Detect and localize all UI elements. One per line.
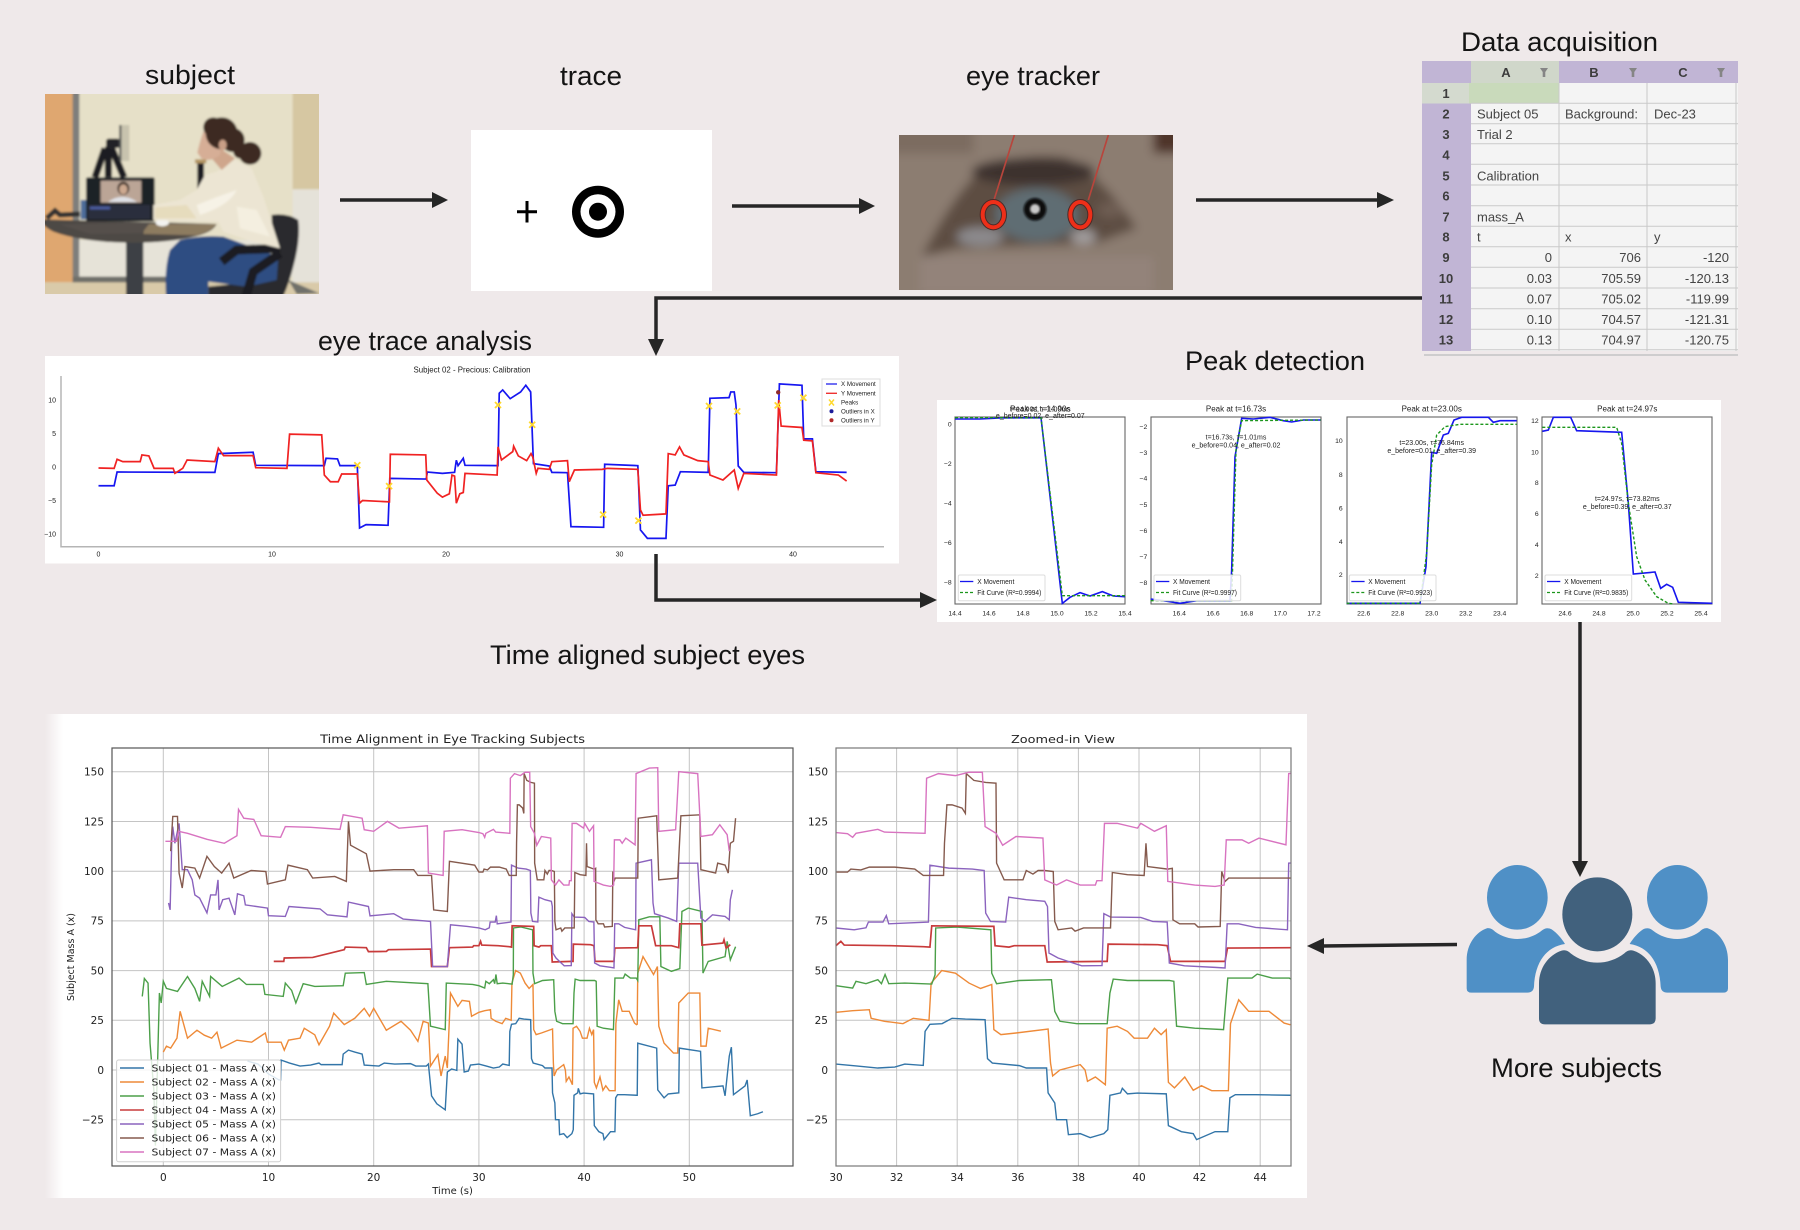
chart: time alignment in eye tracking subjects: Subject Mass A (x) [66,913,77,1001]
outlier marker [776,390,780,394]
table: spreadsheet of eye data [1422,61,1738,355]
arrow: eye trace analysis to peak detection [656,554,937,608]
chart legend: Outliers in Y [841,418,875,424]
plot: peak at 16.73s: t=16.73s, τ=1.01ms [1206,434,1267,442]
panel: peak detection plots [937,400,1721,622]
panel: eye trace analysis chart: 30 [616,552,623,558]
table: spreadsheet of eye data: -120.13 [1685,271,1729,286]
chart legend: Y Movement [841,390,876,398]
chart legend [822,379,880,426]
plot: peak at 24.97s: Fit Curve (R²=0.9835) [1564,590,1628,597]
plot: peak at 23.00s [1335,405,1517,618]
chart: time alignment in eye tracking subjects: 50 [91,965,104,977]
chart: time alignment in eye tracking subjects: 40 [577,1172,591,1184]
panel: eye trace analysis chart: 0 [97,552,101,558]
panel: eye trace analysis chart: −5 [48,498,56,505]
chart: zoomed-in view: 44 [1254,1172,1267,1184]
plot: peak at 14.90s: −6 [944,540,952,547]
chart legend: Outliers in X [841,408,875,416]
plot: peak at 23.00s: 23.2 [1459,610,1473,618]
panel: trace stimulus [471,130,712,291]
table: spreadsheet of eye data: 3 [1442,127,1450,142]
chart legend: X Movement [841,381,876,388]
plot: peak at 14.90s: 0 [948,422,952,428]
arrow: eye tracker to data acquisition [1196,192,1394,208]
plot: peak at 23.00s: Fit Curve (R²=0.9923) [1368,590,1432,597]
chart legend: subjects: Subject 06 - Mass A (x) [152,1134,276,1145]
plot: peak at 16.73s: Fit Curve (R²=0.9997) [1173,590,1237,597]
chart: zoomed-in view: 34 [951,1172,964,1184]
table: spreadsheet of eye data: 6 [1442,188,1450,204]
table: spreadsheet of eye data: 0.10 [1527,312,1552,327]
chart: zoomed-in view [806,735,1292,1181]
chart: zoomed-in view: 0 [821,1065,828,1077]
plot: peak at 14.90s: −8 [944,580,952,586]
chart: zoomed-in view: −25 [806,1114,828,1126]
plot: peak at 23.00s: 23.4 [1493,610,1507,618]
plot: peak at 16.73s: X Movement [1173,579,1210,586]
plot: peak at 16.73s: −5 [1140,502,1148,509]
chart: time alignment in eye tracking subjects: Time Alignment in Eye Tracking Subjects [319,732,585,746]
table: spreadsheet of eye data: 2 [1442,106,1450,122]
plot: peak at 16.73s: −2 [1140,424,1148,431]
plot: peak at 24.97s: e_before=0.39, e_after=0.37 [1583,504,1672,511]
chart legend: subjects: Subject 04 - Mass A (x) [152,1106,276,1117]
chart legend: subjects: Subject 02 - Mass A (x) [152,1078,276,1089]
plot: peak at 16.73s: −4 [1140,476,1148,482]
table: spreadsheet of eye data: 706 [1619,250,1641,265]
chart: zoomed-in view: 75 [815,916,828,928]
table: spreadsheet of eye data: 10 [1439,271,1453,286]
heading: time aligned subject eyes: Time aligned subject eyes [490,640,805,670]
plot: peak at 16.73s: −8 [1140,580,1148,587]
plot: peak at 16.73s: 16.8 [1240,610,1254,618]
table: spreadsheet of eye data: 705.02 [1601,292,1641,306]
plot: peak at 23.00s: t=23.00s, τ=76.84ms [1399,440,1465,447]
icon: bullseye target [572,186,624,238]
chart: zoomed-in view: 40 [1132,1172,1146,1184]
table: spreadsheet of eye data: 5 [1442,168,1450,184]
icon: group of people [1467,865,1728,1024]
plot: peak at 24.97s: 24.8 [1592,610,1606,618]
chart: zoomed-in view: 30 [829,1172,843,1184]
table: spreadsheet of eye data: Dec-23 [1654,106,1696,122]
table: spreadsheet of eye data: Background: [1565,106,1638,122]
heading: subject: subject [145,60,236,90]
plot: peak at 14.90s: 15.4 [1118,610,1132,618]
table: spreadsheet of eye data: y [1654,230,1661,244]
plot: peak at 23.00s: X Movement [1368,579,1405,586]
chart: zoomed-in view: 25 [815,1015,828,1027]
plot: peak at 14.90s: −2 [944,461,952,468]
plot: peak at 14.90s: −4 [944,500,952,508]
table: spreadsheet of eye data: 1 [1442,86,1450,101]
plot: peak at 16.73s: −6 [1140,528,1148,535]
plot: peak at 16.73s: −3 [1140,450,1148,457]
table: spreadsheet of eye data: 8 [1442,230,1450,244]
table: spreadsheet of eye data: 0 [1545,250,1552,265]
plot: peak at 14.90s: 14.8 [1016,610,1030,618]
plot: peak at 16.73s: 17.0 [1274,610,1287,618]
table: spreadsheet of eye data: -120 [1703,250,1729,265]
plot: peak at 16.73s: 17.2 [1307,610,1321,618]
plot: peak at 14.90s: X Movement [977,579,1014,586]
plot: peak at 14.90s: 15.2 [1084,610,1098,618]
table: spreadsheet of eye data: Subject 05 [1477,106,1538,122]
table: spreadsheet of eye data: 704.97 [1601,332,1641,348]
chart: time alignment in eye tracking subjects: 25 [91,1015,104,1027]
chart: time alignment in eye tracking subjects: 75 [91,916,104,928]
plot: peak at 16.73s: e_before=0.04, e_after=0.02 [1192,442,1280,450]
heading: data acquisition: Data acquisition [1461,27,1658,57]
table: spreadsheet of eye data: mass_A [1477,210,1524,224]
chart: time alignment in eye tracking subjects: 100 [84,866,104,878]
plot: peak at 16.73s: −7 [1140,554,1148,561]
plot: peak at 16.73s: 16.6 [1206,610,1220,618]
chart: zoomed-in view: 38 [1072,1172,1085,1184]
plot: peak at 24.97s: 2 [1535,573,1539,580]
table: spreadsheet of eye data: 13 [1439,332,1453,348]
arrow: peak detection to more subjects [1572,622,1588,877]
plot: peak at 23.00s: 8 [1339,472,1343,479]
plot: peak at 24.97s: 8 [1535,480,1539,487]
chart legend: subjects: Subject 03 - Mass A (x) [152,1092,276,1103]
chart: zoomed-in view: 150 [808,766,828,778]
plot: peak at 24.97s: 6 [1535,511,1539,518]
table: spreadsheet of eye data: -119.99 [1686,292,1729,306]
chart: zoomed-in view: 36 [1011,1172,1025,1184]
table: spreadsheet of eye data: Calibration [1477,168,1539,184]
table: spreadsheet of eye data: 9 [1442,250,1450,265]
panel: eye trace analysis chart: 20 [442,552,450,558]
plot: peak at 14.90s: t=14.90s, τ=1.00ms [1010,407,1071,414]
heading: eye tracker: eye tracker [966,61,1100,91]
plot: peak at 23.00s: Peak at t=23.00s [1402,405,1462,414]
arrow: subject to trace [340,192,448,208]
chart legend: subjects: Subject 01 - Mass A (x) [152,1064,276,1075]
plot: peak at 24.97s: Peak at t=24.97s [1597,405,1657,414]
chart: zoomed-in view: 32 [890,1172,903,1184]
panel: eye trace analysis chart: 10 [268,552,276,558]
chart: time alignment in eye tracking subjects: 50 [683,1172,696,1184]
plot: peak at 24.97s [1531,405,1712,618]
chart: zoomed-in view: 125 [808,816,828,828]
chart: zoomed-in view: 42 [1193,1172,1206,1184]
table: spreadsheet of eye data: 7 [1442,210,1450,224]
table: spreadsheet of eye data: 11 [1439,292,1453,306]
table: spreadsheet of eye data: A [1501,65,1511,80]
plot: peak at 14.90s: 14.6 [982,610,996,618]
heading: more subjects: More subjects [1491,1053,1662,1083]
table: spreadsheet of eye data: 705.59 [1601,271,1641,286]
plot: peak at 23.00s: 4 [1339,539,1343,546]
chart: time alignment in eye tracking subjects: Time (s) [431,1186,473,1197]
panel: eye trace analysis chart: −10 [44,532,56,538]
plot: peak at 24.97s: t=24.97s, τ=73.82ms [1595,496,1660,503]
plot: peak at 23.00s: e_before=0.01, e_after=0.39 [1387,448,1476,455]
plot: peak at 23.00s: 22.6 [1357,610,1371,618]
plot: peak at 23.00s: 6 [1339,506,1343,512]
panel: eye trace analysis chart: Subject 02 - Precious: Calibration [414,366,530,374]
table: spreadsheet of eye data: 704.57 [1601,312,1641,327]
panel: eye trace analysis chart: 0 [52,464,56,472]
photo: subject seated at eye tracker [45,94,319,294]
arrow: more subjects to time alignment [1307,938,1457,954]
plot: peak at 14.90s [944,405,1132,618]
plot: peak at 24.97s: 24.6 [1558,610,1572,618]
table: spreadsheet of eye data: t [1477,230,1481,244]
heading: eye trace analysis: eye trace analysis [318,326,532,356]
table: spreadsheet of eye data: 12 [1439,312,1453,327]
plot: peak at 14.90s: e_before=0.02, e_after=0.07 [996,413,1085,420]
arrow: trace to eye tracker [732,198,875,214]
chart: time alignment in eye tracking subjects: 20 [367,1172,380,1184]
chart: time alignment in eye tracking subjects: 30 [472,1172,486,1184]
chart legend: Peaks [841,400,858,406]
chart: time alignment in eye tracking subjects: 10 [262,1172,275,1184]
chart: time alignment in eye tracking subjects: 125 [84,816,104,828]
chart: zoomed-in view: 100 [808,866,828,878]
chart legend: subjects: Subject 05 - Mass A (x) [152,1120,276,1131]
panel: eye trace analysis chart: 40 [789,552,797,558]
plot: peak at 24.97s: 25.4 [1694,610,1708,618]
heading: trace: trace [560,61,622,91]
chart: time alignment in eye tracking subjects [66,732,793,1197]
chart legend: subjects [117,1060,281,1162]
table: spreadsheet of eye data: B [1589,65,1599,80]
chart: time alignment in eye tracking subjects: −25 [82,1114,104,1126]
icon: fixation cross [517,201,537,222]
plot: peak at 24.97s: 10 [1531,450,1539,456]
table: spreadsheet of eye data: 0.13 [1527,332,1552,348]
panel: eye trace analysis chart [44,356,899,564]
table: spreadsheet of eye data: Trial 2 [1477,127,1513,142]
table: spreadsheet of eye data: x [1565,230,1572,244]
panel: eye trace analysis chart: 10 [48,398,56,404]
panel: time alignment charts [52,714,1307,1198]
plot: peak at 23.00s: 2 [1339,572,1343,579]
plot: peak at 24.97s: 12 [1531,418,1539,425]
chart: time alignment in eye tracking subjects: 150 [84,766,104,778]
plot: peak at 24.97s: 25.0 [1626,610,1640,618]
plot: peak at 24.97s: 25.2 [1660,610,1674,618]
arrow: spreadsheet to eye trace analysis [648,298,1422,356]
plot: peak at 16.73s: Peak at t=16.73s [1206,405,1266,414]
table: spreadsheet of eye data: -121.31 [1685,312,1729,327]
plot: peak at 16.73s: 16.4 [1173,610,1186,618]
photo: eye tracker close up [899,135,1173,290]
plot: peak at 14.90s: Peak at t=14.90s [1010,405,1070,414]
table: spreadsheet of eye data: 0.07 [1527,292,1552,306]
table: spreadsheet of eye data: -120.75 [1685,332,1729,348]
plot: peak at 14.90s: 15.0 [1050,610,1064,618]
table: spreadsheet of eye data: 4 [1442,148,1450,162]
chart: zoomed-in view: 50 [815,965,828,977]
plot: peak at 16.73s [1140,405,1321,618]
table: spreadsheet of eye data: C [1678,65,1688,80]
chart: zoomed-in view: Zoomed-in View [1011,733,1115,746]
plot: peak at 23.00s: 23.0 [1425,610,1439,618]
chart: time alignment in eye tracking subjects: 0 [160,1172,167,1184]
plot: peak at 23.00s: 22.8 [1391,610,1405,618]
plot: peak at 23.00s: 10 [1335,438,1343,445]
plot: peak at 14.90s: Fit Curve (R²=0.9994) [977,590,1041,597]
heading: peak detection: Peak detection [1185,346,1365,376]
panel: eye trace analysis chart: 5 [52,431,56,438]
plot: peak at 24.97s: X Movement [1564,579,1601,586]
plot: peak at 24.97s: 4 [1535,542,1539,549]
peak markers [354,395,806,524]
table: spreadsheet of eye data: 0.03 [1527,271,1552,286]
plot: peak at 14.90s: 14.4 [948,610,962,618]
chart legend: subjects: Subject 07 - Mass A (x) [152,1148,276,1159]
chart: time alignment in eye tracking subjects: 0 [97,1065,104,1077]
